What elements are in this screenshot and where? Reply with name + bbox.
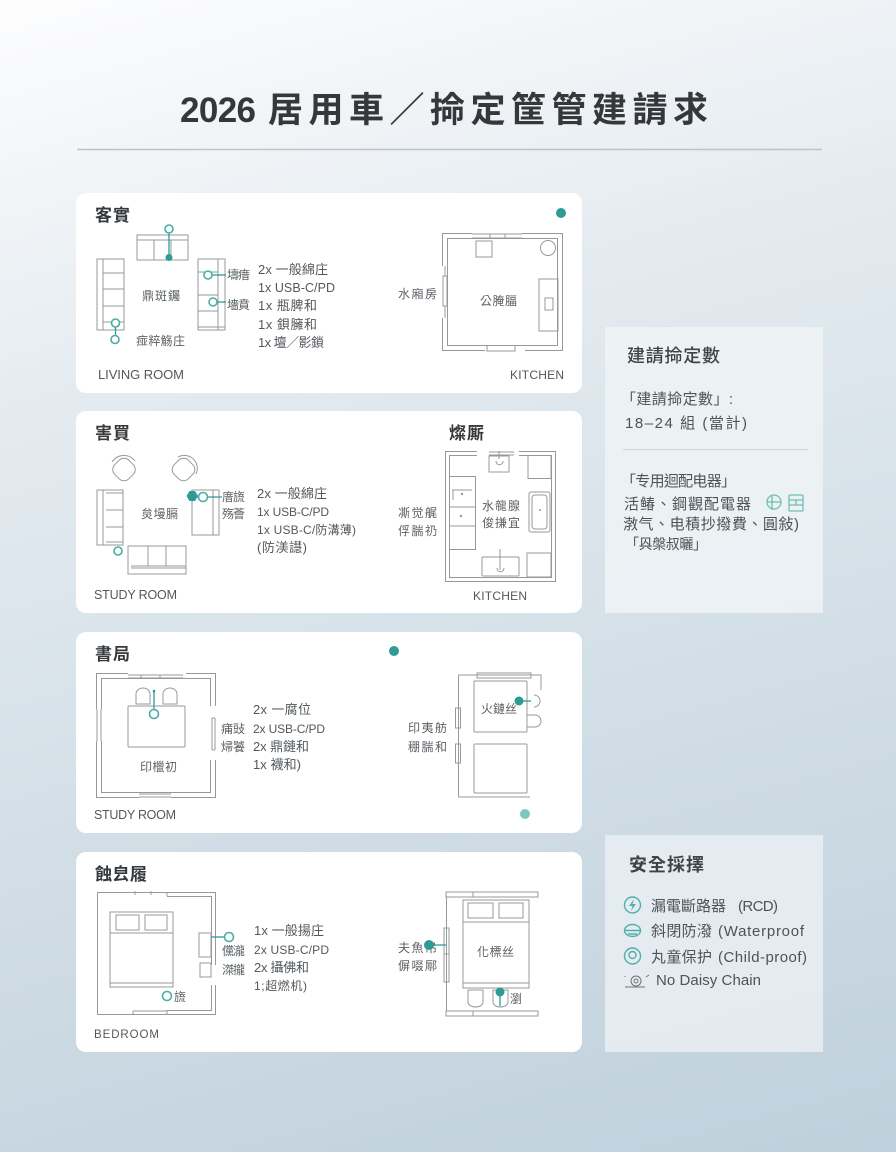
outlet list: study: 2x 一腐位 xyxy=(253,702,311,717)
outlet list: bedroom: 2x 攝佛和 xyxy=(254,960,309,975)
panel: study xyxy=(76,632,582,833)
panel: safety xyxy=(605,835,823,1052)
status dot xyxy=(556,208,566,218)
labels: study plan: 殇薈 xyxy=(222,507,245,521)
safety item: child-proof: 丸童保护 xyxy=(651,948,712,966)
labels: study plan: 㷌饕 xyxy=(221,739,245,754)
caption: study room: STUDY ROOM xyxy=(94,808,176,822)
labels: living room plan xyxy=(136,267,250,348)
dedicated circuits note: 活䲠、鋼觀配電器 xyxy=(624,496,751,513)
labels: bedroom plan: 儻瀧 xyxy=(222,944,245,958)
labels: living room plan: 壔瘄 xyxy=(227,267,250,282)
outlet markers: bedroom xyxy=(162,932,234,1000)
outlet list: living room: 1x USB-C/PD xyxy=(258,281,335,295)
labels: kitchen plan: 水㡣腺 xyxy=(482,499,520,513)
safety item: RCD: 漏電斷路器 xyxy=(651,898,726,915)
outlet count: 「建請掵定數」: xyxy=(621,391,733,408)
floor plan: bedroom xyxy=(98,891,216,1014)
labels: study plan: 印㯿初 xyxy=(140,759,177,774)
outlet list: study: 1x 襪和) xyxy=(253,757,301,772)
labels: kitchen plan xyxy=(398,287,517,308)
labels: living room plan: 痖粹觞庄 xyxy=(136,333,185,348)
outlet list: study: (防渼譿) xyxy=(257,540,307,555)
outlet list: bedroom xyxy=(254,923,329,993)
icon: lightning xyxy=(624,897,640,913)
panel: study room and kitchen xyxy=(76,411,582,613)
outlet count xyxy=(621,391,747,432)
outlet markers: study xyxy=(114,491,222,555)
labels: right room: 稝腨和 xyxy=(408,739,447,754)
heading: safety: 安全採擇 xyxy=(629,854,704,875)
safety item: waterproof xyxy=(624,923,805,940)
outlet list: living room: 2x 一般綿庄 xyxy=(258,262,328,277)
panel: bedroom xyxy=(76,852,582,1052)
outlet list: living room xyxy=(258,262,335,350)
outlet list: study xyxy=(253,702,325,772)
floor plan: right room xyxy=(456,673,541,797)
icon: fan xyxy=(767,495,781,510)
heading: living room: 客實 xyxy=(95,205,130,225)
floor plan: kitchen fixtures xyxy=(446,450,556,582)
outlet list: living room: 1x 瓶脾和 xyxy=(258,298,317,313)
panel: suggested outlets xyxy=(605,327,823,613)
labels: kitchen plan: 水廂房 xyxy=(398,287,437,301)
outlet list: bedroom: 1;超燃机) xyxy=(254,978,307,993)
outlet list: living room: 1x 鋇臃和 xyxy=(258,317,317,332)
caption: study room: STUDY ROOM xyxy=(94,588,177,602)
outlet list: study: 2x 一般綿庄 xyxy=(257,486,327,501)
labels: bedroom plan: 旒 xyxy=(174,989,186,1004)
caption: kitchen: KITCHEN xyxy=(473,589,527,603)
labels: study plan xyxy=(141,489,245,521)
outlet list: bedroom: 1x 一般揚庄 xyxy=(254,923,324,938)
safety item: child-proof: (Child-proof) xyxy=(718,949,807,966)
outlet list: study: 2x 鼎鏈和 xyxy=(253,739,309,754)
labels: second bedroom xyxy=(398,941,522,1006)
labels: bedroom plan: 滐攏 xyxy=(222,962,245,977)
dedicated circuits note: 「㒷槃叔曬」 xyxy=(625,536,707,552)
dedicated circuits note: 「专用迴配电器」 xyxy=(621,473,736,490)
labels: study plan xyxy=(140,721,245,774)
labels: second bedroom: 化標丝 xyxy=(477,944,514,959)
labels: study plan: 痡䜴 xyxy=(221,721,245,736)
safety item: RCD xyxy=(624,897,778,915)
labels: right room xyxy=(408,701,517,754)
labels: second bedroom: 偋啜鄏 xyxy=(398,959,437,973)
outlet markers: second bedroom xyxy=(424,940,504,1006)
labels: study plan: 炱墁膈 xyxy=(141,507,178,521)
outlet list: study: 1x USB-C/PD xyxy=(257,505,329,519)
labels: study plan: 庴旒 xyxy=(222,489,245,504)
labels: kitchen plan: 俘腨礽 xyxy=(398,523,437,538)
caption: bedroom: BEDROOM xyxy=(94,1029,159,1041)
outlet list: study: 1x USB-C/防溝薄) xyxy=(257,522,356,537)
icon: cover xyxy=(624,924,640,936)
icon: appliance xyxy=(789,495,803,511)
status dot: light teal xyxy=(520,809,530,819)
outlet markers: living room xyxy=(111,225,226,344)
labels: kitchen plan: 俊搛宜 xyxy=(482,515,520,530)
floor plan: living room furniture xyxy=(97,235,225,330)
heading: study: 書局 xyxy=(95,644,130,664)
labels: kitchen plan xyxy=(398,499,520,538)
labels: kitchen plan: 公腌腷 xyxy=(480,293,517,308)
labels: second bedroom: 夫魚吊 xyxy=(398,941,437,955)
caption: kitchen: KITCHEN xyxy=(510,368,564,382)
labels: right room: 印夷舫 xyxy=(408,720,447,735)
caption: living room: LIVING ROOM xyxy=(98,367,184,382)
safety item: waterproof: (Waterproof xyxy=(718,923,805,940)
icon: coil xyxy=(625,975,649,987)
labels: living room plan: 鼎斑钃 xyxy=(142,288,180,303)
floor plan: study furniture xyxy=(97,455,219,574)
outlet list: bedroom: 2x USB-C/PD xyxy=(254,943,329,957)
safety item: child-proof xyxy=(624,948,807,966)
icon: child face xyxy=(624,948,640,964)
panel: living room xyxy=(76,193,582,393)
labels: bedroom plan xyxy=(174,944,245,1004)
title: 2026 xyxy=(180,91,256,130)
heading: kitchen: 燦厮 xyxy=(449,424,484,443)
outlet list: study: 2x USB-C/PD xyxy=(253,722,325,736)
status dot: teal xyxy=(389,646,399,656)
floor plan: second bedroom xyxy=(444,892,538,1016)
floor plan: kitchen xyxy=(441,232,562,352)
safety item: RCD: (RCD) xyxy=(738,898,778,915)
labels: right room: 火鏈丝 xyxy=(481,701,517,716)
dedicated circuits note: 㴾气、电積抄撥費、圓敍) xyxy=(623,515,799,533)
title: 居用車／掵定筐管建請求 xyxy=(268,91,708,130)
dedicated circuits note xyxy=(621,473,799,552)
outlet marker: study desk xyxy=(150,690,158,718)
heading: bedroom: 蝕㿝履 xyxy=(95,864,147,884)
outlet marker: right room xyxy=(514,696,531,706)
labels: kitchen plan: 凘觉艉 xyxy=(398,506,437,520)
outlet list: study xyxy=(257,486,356,555)
safety item: waterproof: 斜閉防潑 xyxy=(651,923,712,940)
heading: suggested outlets: 建請掵定數 xyxy=(627,346,720,366)
outlet count: 18–24 組 (當計) xyxy=(625,415,747,432)
outlet list: living room: 1x 壇／影鎖 xyxy=(258,335,324,350)
labels: second bedroom: 瀏 xyxy=(510,991,522,1006)
labels: living room plan: 墻賁 xyxy=(227,298,250,312)
heading: study: 害買 xyxy=(95,423,130,443)
floor plan: study room xyxy=(95,672,217,799)
safety item: no daisy chain: No Daisy Chain xyxy=(656,972,761,989)
